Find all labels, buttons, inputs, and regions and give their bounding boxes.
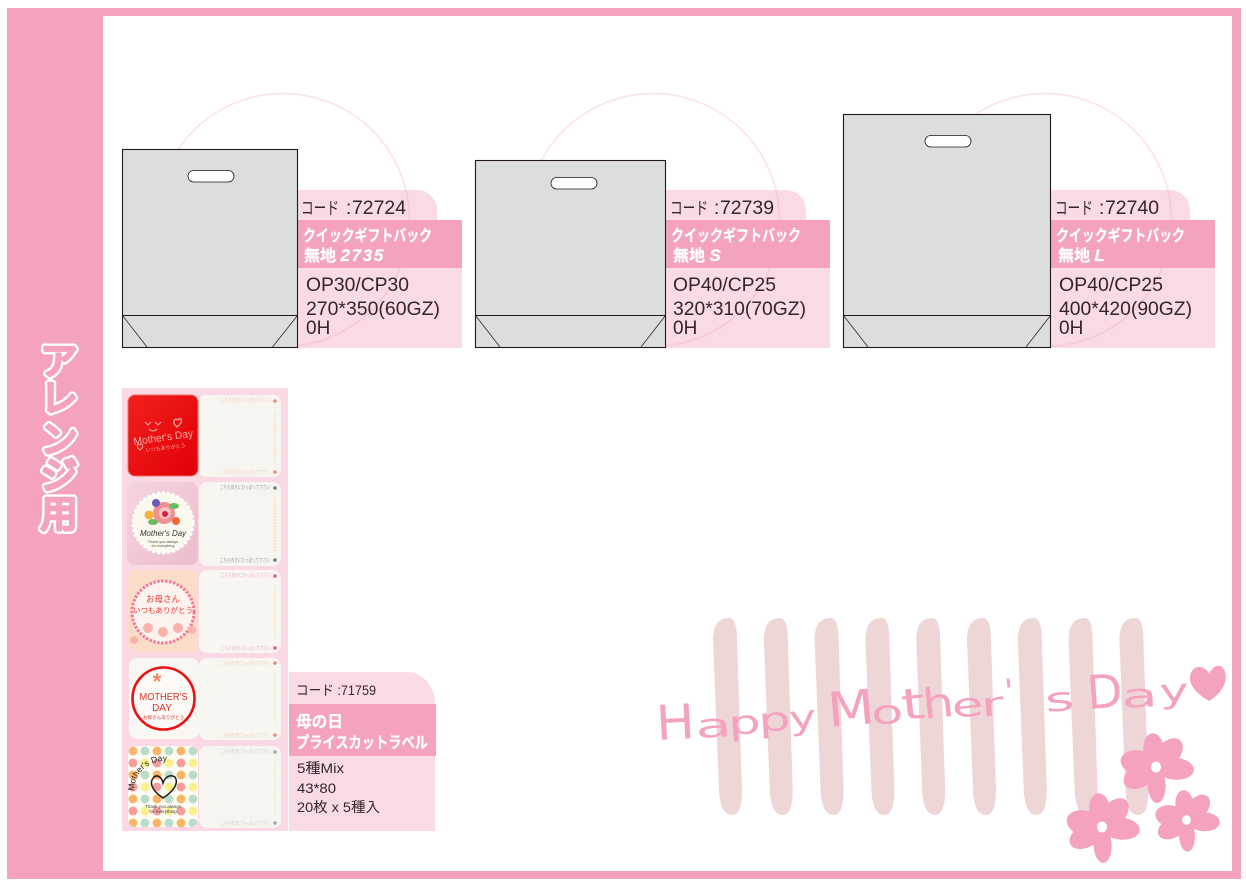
decoration: Happy Mother's Day lettering [655, 664, 1190, 752]
product name [671, 227, 801, 265]
decoration: Happy Mother's Day lettering: a [694, 706, 733, 746]
specifications: 5種Mix [297, 760, 344, 776]
label card 5: polka dots: for everything [149, 809, 177, 814]
product name: プライスカットラベル [296, 734, 428, 752]
decoration: Happy Mother's Day lettering: e [950, 685, 985, 726]
product name: 無地 S [673, 246, 721, 265]
vertical title [40, 341, 78, 535]
specifications: 0H [306, 318, 330, 339]
label card 5: polka dots: Thank you always [145, 804, 182, 809]
product name: クイックギフトバック [671, 227, 801, 245]
decoration: Happy Mother's Day lettering: t [899, 679, 927, 731]
label card 3: lace: こちら向きにひっぱって下さい [221, 645, 271, 652]
decorative circle [918, 94, 1172, 346]
decoration: Happy Mother's Day lettering: r [979, 684, 1006, 725]
vertical title: ア [40, 341, 78, 382]
label card 5: polka dots: Mother's Day [128, 756, 167, 790]
decoration: Happy Mother's Day lettering: o [869, 692, 905, 733]
product code: : [346, 198, 351, 219]
decoration: Happy Mother's Day lettering: y [787, 698, 818, 738]
decoration: Happy Mother's Day lettering: h [920, 678, 956, 729]
specifications: 320*310(70GZ) [673, 299, 806, 320]
decoration: Happy Mother's Day lettering: a [1120, 676, 1159, 716]
label card 5: polka dots [128, 746, 281, 828]
label card 5: polka dots: こちら向きにひっぱって下さい [220, 820, 270, 827]
product name: 母の日 [296, 714, 343, 731]
product code: コード [670, 199, 708, 218]
specifications [673, 275, 806, 339]
label card 2: rose: こちら向きにひっぱって下さい [220, 557, 270, 564]
label card 3: lace: こちら向きにひっぱって下さい [221, 572, 271, 579]
product code: コード :71759 [296, 683, 376, 698]
product code [1055, 198, 1159, 219]
bag illustration [844, 114, 1050, 348]
label card 4: red ring [129, 658, 281, 740]
decorative circle [156, 94, 410, 346]
vertical title: 用 [40, 494, 78, 535]
label card 2: rose: Thank you always [148, 540, 178, 544]
product code: コード [301, 199, 339, 218]
product name [303, 227, 432, 265]
label card 4: red ring: * [153, 669, 162, 694]
label card 1: red [128, 395, 281, 477]
label card 4: red ring: こちら向きにひっぱって下さい [220, 732, 270, 739]
product name: 無地 2735 [304, 246, 385, 265]
product code: コード [1055, 199, 1093, 218]
decoration: Happy Mother's Day lettering: y [1158, 671, 1190, 711]
vertical title: ン [40, 419, 78, 460]
decoration: Happy Mother's Day lettering: H [655, 694, 696, 752]
specifications: 0H [673, 318, 697, 339]
specifications [306, 275, 440, 339]
product code: 72740 [1105, 198, 1159, 219]
product name [296, 714, 428, 752]
label card 4: red ring: お母さんありがとう [143, 714, 184, 721]
product name: クイックギフトバック [303, 227, 432, 245]
specifications: 43*80 [297, 780, 336, 796]
label card 1: red: こちら向きにひっぱって下さい [221, 397, 271, 404]
decoration: striped background [713, 618, 1148, 815]
icon: flower right [1153, 789, 1221, 852]
vertical title: ア [40, 341, 78, 382]
panel: price cut label info [289, 672, 436, 831]
specifications: 400*420(90GZ) [1059, 299, 1192, 320]
product code [670, 198, 774, 219]
vertical title: レ [40, 378, 78, 419]
product code [301, 198, 406, 219]
label card 4: red ring: こちら向きにひっぱって下さい [220, 660, 270, 667]
product code: 72724 [352, 198, 406, 219]
panel: bag 72739 [476, 94, 830, 348]
label card 3: lace: いつもありがとう [133, 605, 193, 615]
specifications: OP40/CP25 [1059, 275, 1163, 296]
specifications [1059, 275, 1192, 339]
icon: heart [1190, 666, 1226, 701]
product code: 72739 [720, 198, 774, 219]
product code: : [1099, 198, 1104, 219]
specifications: 20枚 x 5種入 [297, 799, 380, 815]
product code: : [714, 198, 719, 219]
label card 1: red: Mother's Day [133, 428, 195, 448]
label card 2: rose [127, 482, 281, 566]
specifications: OP40/CP25 [673, 275, 776, 296]
product name: 無地 L [1058, 246, 1105, 265]
decoration: Happy Mother's Day lettering: p [757, 700, 792, 740]
specifications: 270*350(60GZ) [306, 299, 440, 320]
specifications: 0H [1059, 318, 1083, 339]
vertical title: ジ [40, 455, 78, 496]
vertical title: ジ [40, 455, 78, 496]
bag illustration [476, 160, 666, 348]
vertical title: ン [40, 419, 78, 460]
label card 3: lace: お母さん [146, 594, 180, 604]
label card 2: rose: こちら向きにひっぱって下さい [220, 484, 270, 491]
specifications: OP30/CP30 [306, 275, 409, 296]
label card 4: red ring: MOTHER'S [140, 692, 188, 703]
vertical title: レ [40, 378, 78, 419]
decoration: Happy Mother's Day lettering: M [825, 679, 877, 739]
label card 2: rose: Mother's Day [140, 528, 187, 538]
label card 3: lace [128, 570, 281, 653]
icon: flower large [1118, 732, 1195, 803]
decorative circle [526, 94, 780, 346]
decoration: Happy Mother's Day lettering: ' [1003, 671, 1016, 711]
specifications [297, 760, 380, 815]
label card 4: red ring: DAY [152, 703, 172, 714]
bag illustration [122, 150, 298, 348]
panel: bag 72740 [844, 94, 1215, 348]
label card 1: red: いつもありがとう [145, 442, 186, 454]
product name: クイックギフトバック [1056, 227, 1185, 245]
panel: bag 72724 [122, 94, 462, 348]
product name [1056, 227, 1185, 265]
decoration: Happy Mother's Day lettering: D [1085, 664, 1124, 720]
label card 2: rose: for everything [151, 544, 175, 548]
vertical title: 用 [40, 494, 78, 535]
label card 5: polka dots: こちら向きにひっぱって下さい [220, 748, 270, 755]
label card 1: red: こちら向きにひっぱって下さい [220, 469, 270, 476]
decoration: Happy Mother's Day lettering: s [1043, 679, 1076, 720]
decoration: Happy Mother's Day lettering: p [727, 703, 762, 743]
icon: flower bottom [1064, 792, 1141, 863]
panel: price cut label photo [122, 388, 288, 831]
